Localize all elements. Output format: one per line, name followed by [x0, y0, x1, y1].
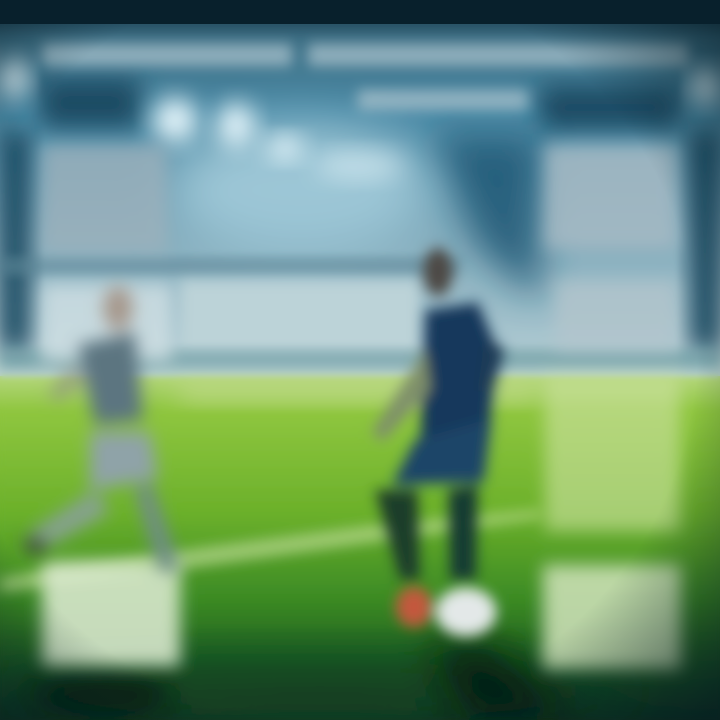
player: right: [372, 248, 505, 580]
title: [42, 44, 688, 110]
player shoes: [396, 587, 496, 636]
stadium background: [0, 0, 720, 380]
top dark band: [0, 0, 720, 24]
stadium lights: [0, 58, 720, 179]
panel: lower right: [545, 376, 680, 531]
panel: middle left: [42, 284, 172, 362]
panel: bottom left: [42, 562, 180, 666]
player: left: [24, 286, 180, 572]
panel: top right: [545, 145, 677, 249]
panel: top left: [42, 145, 167, 253]
panel: bottom right: [543, 565, 681, 669]
field: [0, 376, 720, 720]
panel: middle right: [555, 280, 677, 350]
